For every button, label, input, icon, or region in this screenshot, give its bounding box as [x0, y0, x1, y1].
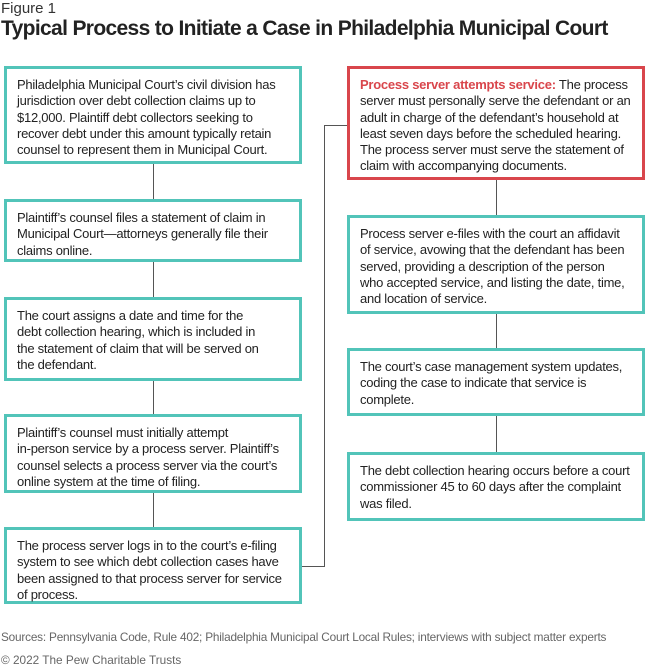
box 8: [347, 348, 645, 416]
box 3: the defendant.: [17, 357, 97, 372]
box 9: [347, 452, 645, 521]
box 8: coding the case to indicate that service is: [360, 375, 586, 390]
box 6 (red): claim with accompanying documents.: [360, 158, 567, 173]
box 7: [347, 215, 645, 314]
box 3: The court assigns a date and time for the: [17, 308, 243, 323]
box 5: [4, 527, 302, 604]
box 1: jurisdiction over debt collection claims up to: [17, 93, 256, 108]
box 7: served, providing a description of the person: [360, 259, 605, 274]
box 3: the statement of claim that will be served on: [17, 341, 259, 356]
box 2: [4, 199, 302, 262]
box 6 (red): The process server must serve the statement of: [360, 142, 624, 157]
box 4: in-person service by a process server. Plaintiff’s: [17, 441, 279, 456]
title: Typical Process to Initiate a Case in Philadelphia Municipal Court: [1, 17, 608, 40]
box 4: counsel selects a process server via the court’s: [17, 458, 277, 473]
box 1: $12,000. Plaintiff debt collectors seeking to: [17, 110, 253, 125]
box 6 (red): adult in charge of the defendant’s household at: [360, 110, 618, 125]
box 7: of service, avowing that the defendant has been: [360, 242, 624, 257]
box 5: been assigned to that process server for service: [17, 571, 282, 586]
box 9: commissioner 45 to 60 days after the complaint: [360, 479, 621, 494]
box 2: Plaintiff’s counsel files a statement of claim in: [17, 210, 265, 225]
box 6 (red): least seven days before the scheduled hearing.: [360, 126, 621, 141]
figure label: Figure 1: [1, 0, 56, 17]
copyright: © 2022 The Pew Charitable Trusts: [1, 653, 181, 667]
box 1: recover debt under this amount typically retain: [17, 126, 271, 141]
box 7: and location of service.: [360, 291, 487, 306]
box 6 (red): server must personally serve the defendant or an: [360, 93, 631, 108]
box 1: Philadelphia Municipal Court’s civil division has: [17, 77, 275, 92]
box 4: Plaintiff’s counsel must initially attempt: [17, 425, 228, 440]
box 3: debt collection hearing, which is included in: [17, 324, 255, 339]
box 6 (red): [347, 66, 645, 180]
box 8: complete.: [360, 392, 414, 407]
box 2: claims online.: [17, 243, 92, 258]
box 8: The court’s case management system updates,: [360, 359, 622, 374]
box 1: counsel to represent them in Municipal Court.: [17, 142, 267, 157]
box 5: system to see which debt collection cases have: [17, 554, 279, 569]
box 7: who accepted service, and listing the date, time,: [360, 275, 625, 290]
box 4: online system at the time of filing.: [17, 474, 200, 489]
box 5: of process.: [17, 587, 78, 602]
box 6 (red): Process server attempts service: The process: [360, 77, 628, 92]
box 2: Municipal Court—attorneys generally file their: [17, 226, 268, 241]
box 4: [4, 414, 302, 493]
box 7: Process server e-files with the court an affidavit: [360, 226, 620, 241]
box 3: [4, 297, 302, 381]
box 9: was filed.: [360, 496, 412, 511]
box 5: The process server logs in to the court’s e-filing: [17, 538, 277, 553]
box 9: The debt collection hearing occurs before a court: [360, 463, 630, 478]
sources: Sources: Pennsylvania Code, Rule 402; Philadelphia Municipal Court Local Rules; interviews with subject matter experts: [1, 630, 606, 644]
box 1: [4, 66, 302, 164]
